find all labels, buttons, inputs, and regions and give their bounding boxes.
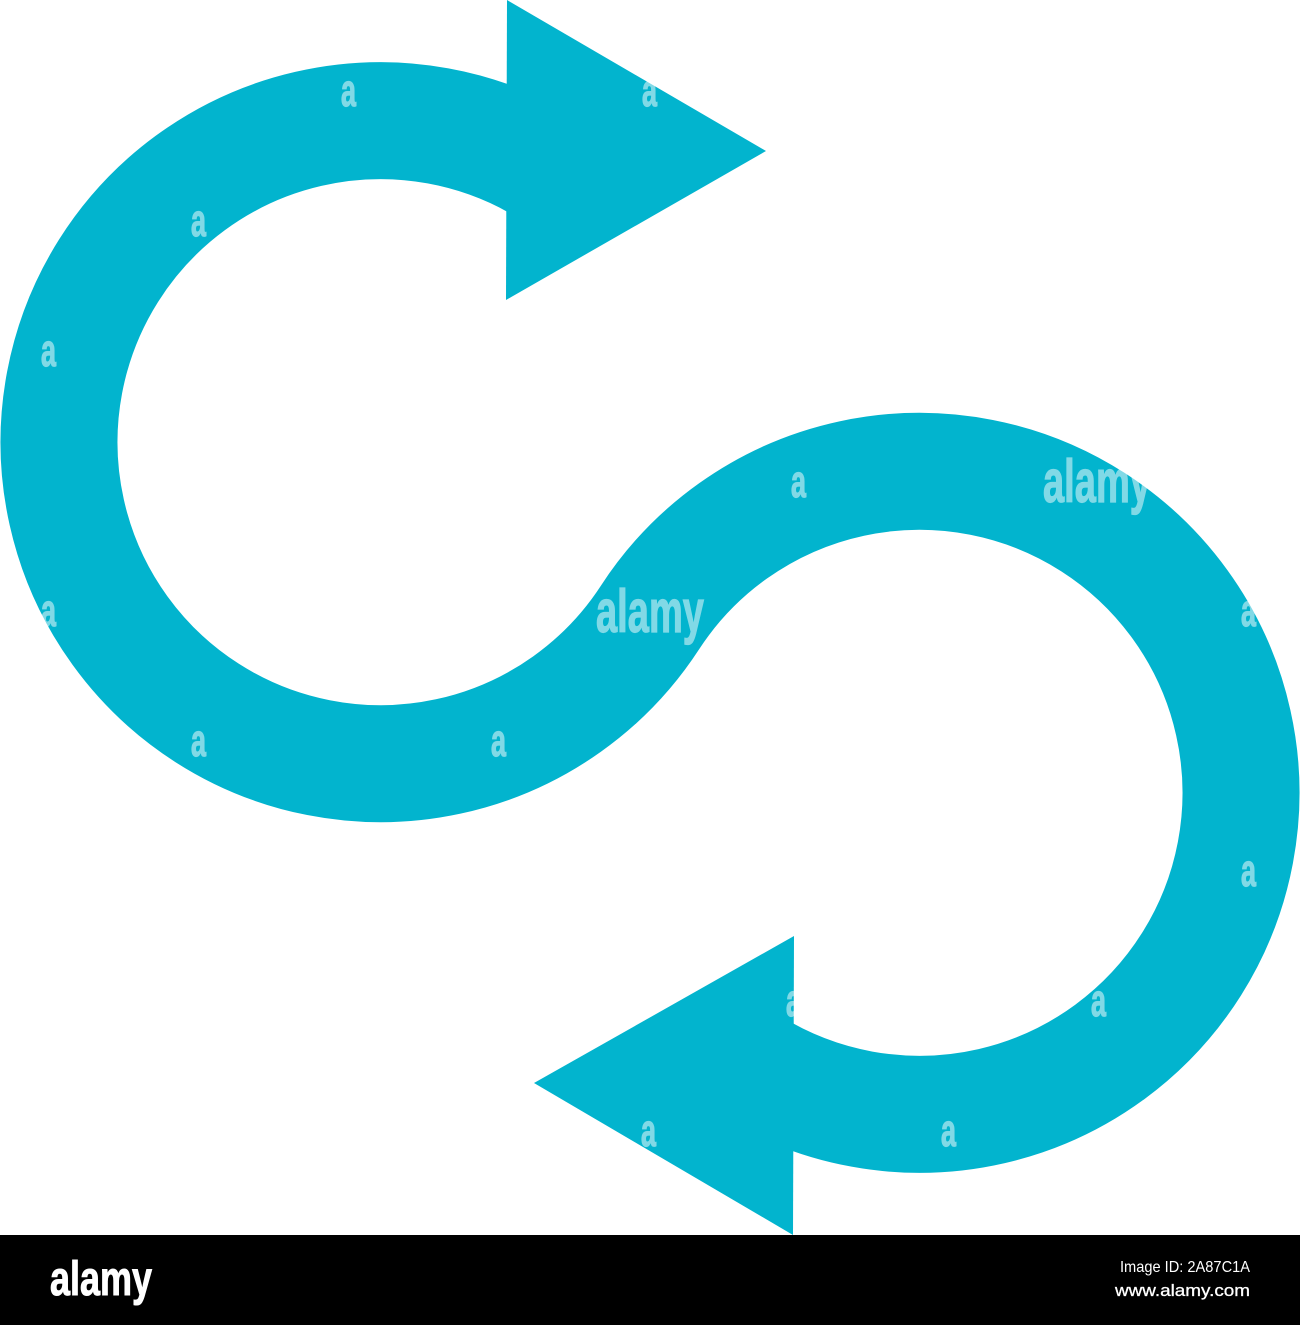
watermarks over the arrow: a <box>41 585 57 636</box>
arrowhead: bottom pointing left <box>534 936 794 1235</box>
website: www.alamy.com <box>1114 1281 1250 1300</box>
arrow body: S curve <box>59 121 1241 1114</box>
watermarks over the arrow: a <box>1241 585 1257 636</box>
watermarks over the arrow: alamy <box>596 578 704 645</box>
arrowhead: top pointing right <box>506 0 766 300</box>
watermarks over the arrow: a <box>341 65 357 116</box>
watermarks over the arrow <box>41 65 1257 1156</box>
watermarks over the arrow: a <box>491 715 507 766</box>
watermarks over the arrow: a <box>786 975 802 1026</box>
watermarks over the arrow: a <box>191 715 207 766</box>
footer logo: alamy <box>50 1253 152 1306</box>
image id: Image ID: 2A87C1A <box>1120 1259 1250 1276</box>
watermarks over the arrow: a <box>41 325 57 376</box>
watermarks over the arrow: a <box>641 1105 657 1156</box>
watermarks over the arrow: a <box>941 1105 957 1156</box>
watermarks over the arrow: a <box>791 456 807 507</box>
footer bar <box>0 1235 1300 1325</box>
watermarks over the arrow: a <box>1091 975 1107 1026</box>
watermarks over the arrow: a <box>642 65 658 116</box>
watermarks over the arrow: a <box>1241 845 1257 896</box>
watermarks over the arrow: a <box>191 195 207 246</box>
watermarks over the arrow: alamy <box>1043 448 1151 515</box>
